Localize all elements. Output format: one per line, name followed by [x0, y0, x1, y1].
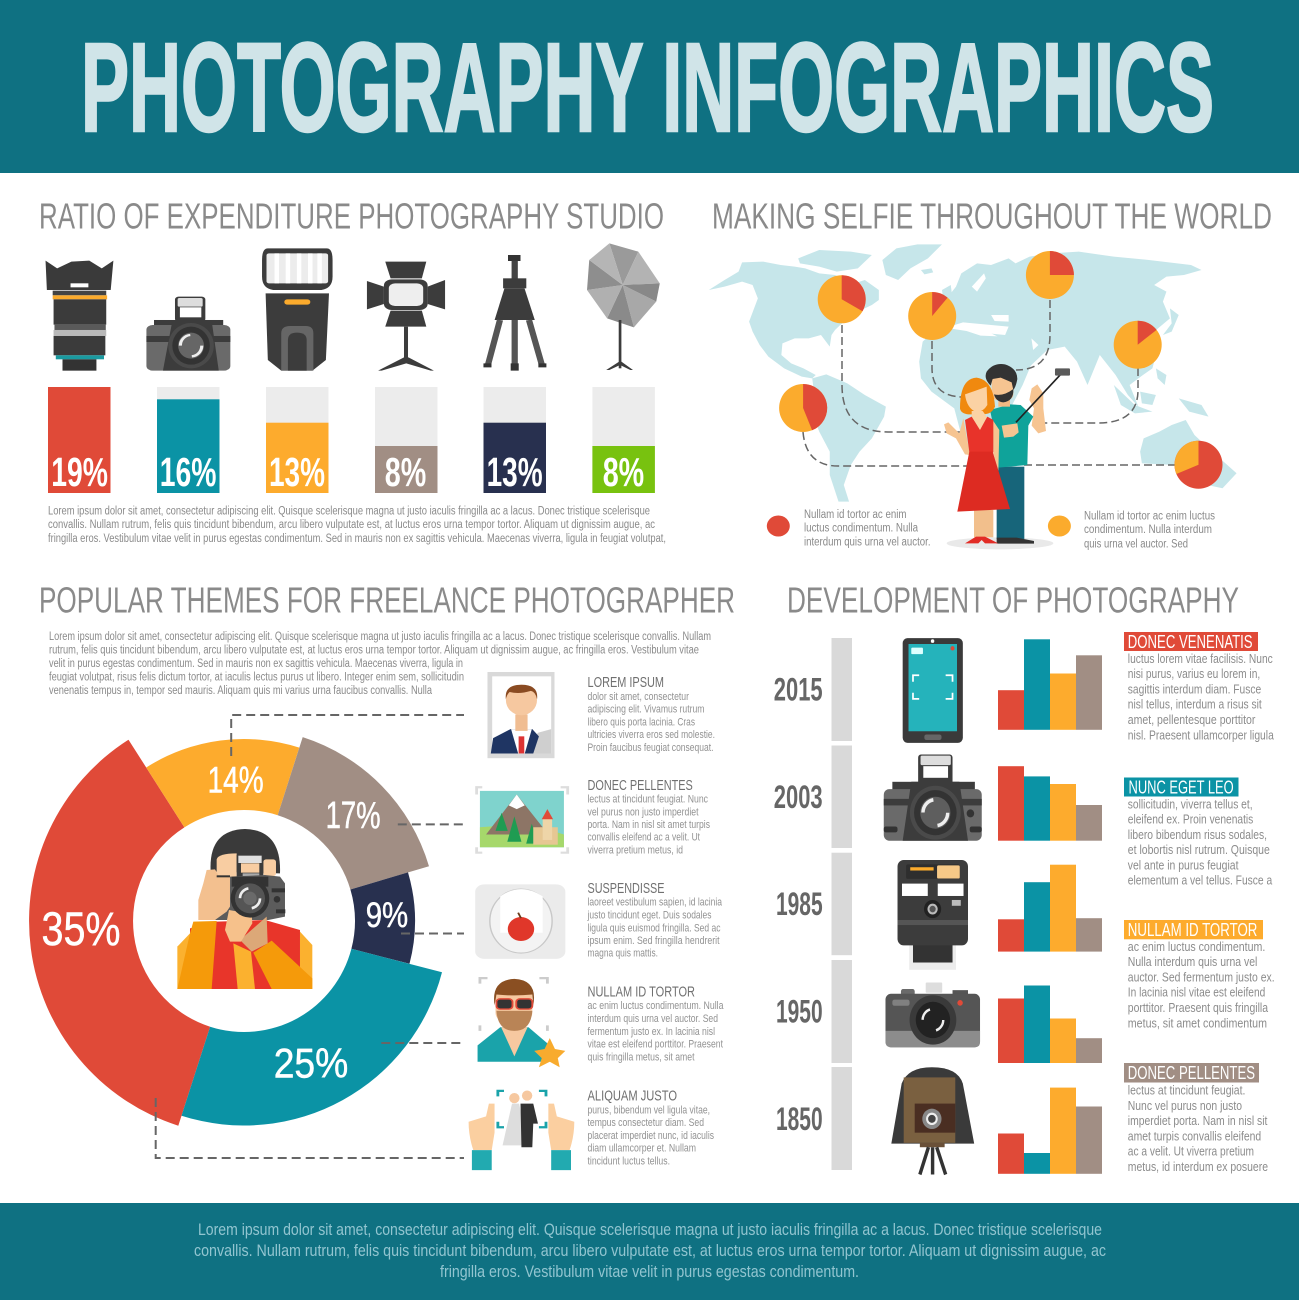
bar: 16%	[157, 387, 220, 495]
icon: flash	[262, 248, 333, 371]
bar chart: 1950	[998, 986, 1102, 1063]
heading: popular themes: POPULAR THEMES FOR FREELANCE PHOTOGRAPHER	[39, 580, 735, 620]
segment: 25%	[182, 949, 442, 1125]
icon: camera	[146, 297, 230, 371]
footer text: convallis. Nullam rutrum, felis quis tincidunt bibendum, arcu libero vulputate est, at luctus eros urna tempor tortor. Aliquam ut dignissim augue, ac	[194, 1242, 1106, 1260]
theme: aliquam justo	[588, 1088, 714, 1167]
note: donec venenatis	[1124, 632, 1274, 742]
icon: antique camera	[891, 1067, 974, 1174]
note: donec venenatis: amet, pellentesque porttitor	[1128, 713, 1255, 727]
theme: lorem ipsum: dolor sit amet, consectetur	[588, 691, 689, 703]
segment: 14%	[146, 739, 299, 827]
bar: 8% green	[592, 387, 655, 495]
timeline years: 1950	[776, 994, 823, 1030]
man	[986, 364, 1070, 544]
timeline bar	[832, 638, 852, 1170]
icon: photographer	[177, 829, 312, 989]
bar chart: expenditure	[48, 387, 655, 495]
paragraph: expenditure	[48, 506, 666, 545]
theme: nullam id tortor: NULLAM ID TORTOR	[588, 984, 695, 1000]
theme: nullam id tortor	[588, 984, 724, 1063]
theme: suspendisse: SUSPENDISSE	[588, 880, 664, 897]
theme: lorem ipsum: adipiscing elit. Vivamus rutrum	[588, 704, 704, 716]
paragraph: expenditure: fringilla eros. Vestibulum vitae velit in purus egestas condimentum. Sed in mauris non ex sagittis vehicula. Maecenas viverra, ligula in feugiat volutpat,	[48, 533, 666, 545]
segment: 9%	[350, 872, 415, 964]
paragraph: themes intro: venenatis tempus in, tempor sed mauris. Aliquam quis mi varius urna faucibus convallis. Nulla	[49, 685, 432, 697]
bar: 16%: 16%	[160, 449, 216, 495]
theme: nullam id tortor: vitae est eleifend porttitor. Praesent	[588, 1039, 723, 1051]
icon: smartphone	[903, 638, 963, 743]
bar chart: 1850	[998, 1088, 1102, 1174]
timeline years: 2003	[774, 779, 823, 815]
note: nullam id tortor: In lacinia nisl vitae est eleifend	[1128, 986, 1265, 1000]
theme: aliquam justo: tincidunt luctus tellus.	[588, 1155, 670, 1167]
note: donec pellentes	[1124, 1063, 1268, 1174]
note: donec venenatis: nisl tellus, interdum a risus sit	[1128, 698, 1262, 712]
icon: portrait	[487, 672, 554, 758]
theme: suspendisse: ligula quis euismod fringilla. Sed ac	[588, 922, 721, 934]
theme: donec pellentes: porta. Nam in nisl sit amet turpis	[588, 819, 710, 831]
theme: suspendisse: ipsum enim. Sed fringilla hendrerit	[588, 935, 720, 947]
note: nunc eget leo: sollicitudin, viverra tellus et,	[1128, 797, 1253, 811]
theme: lorem ipsum: Proin faucibus feugiat consequat.	[588, 742, 714, 754]
theme thumbnails	[469, 672, 574, 1170]
theme: suspendisse: laoreet vestibulum sapien, id lacinia	[588, 897, 723, 909]
theme: aliquam justo: placerat imperdiet nunc, id iaculis	[588, 1130, 714, 1142]
legend: orange: quis urna vel auctor. Sed	[1084, 538, 1188, 550]
note: donec pellentes: metus, id interdum ex posuere	[1128, 1160, 1268, 1174]
note: nunc eget leo: libero bibendum risus sodales,	[1128, 828, 1267, 842]
donut leader lines	[156, 715, 464, 1158]
theme: nullam id tortor: fermentum justo ex. In lacinia nisl	[588, 1026, 715, 1038]
theme: donec pellentes	[588, 777, 710, 856]
note: donec pellentes: amet turpis convallis eleifend	[1128, 1129, 1261, 1143]
icon: star portrait	[478, 978, 565, 1067]
header banner	[0, 0, 1299, 173]
theme: aliquam justo: diam ullamcorper et. Nullam	[588, 1143, 696, 1155]
theme: nullam id tortor: interdum quis urna vel auctor. Sed	[588, 1013, 718, 1025]
bar: 13% navy	[484, 387, 546, 495]
timeline years: 1985	[776, 886, 823, 922]
donut labels: 17%	[326, 795, 381, 837]
footer text: fringilla eros. Vestibulum vitae velit in purus egestas condimentum.	[440, 1263, 859, 1281]
donut labels: 14%	[208, 760, 264, 801]
icon: landscape photo	[477, 787, 568, 853]
legend: red: luctus condimentum. Nulla	[804, 522, 919, 534]
donut labels	[42, 760, 408, 1086]
legend: red	[767, 509, 930, 548]
heading: ratio of expenditure: RATIO OF EXPENDITURE PHOTOGRAPHY STUDIO	[39, 196, 664, 236]
donut labels: 25%	[274, 1040, 348, 1086]
note: nullam id tortor	[1124, 920, 1275, 1030]
pie: asia	[1114, 321, 1162, 369]
theme: suspendisse: magna quis mattis.	[588, 948, 658, 960]
theme: donec pellentes: DONEC PELLENTES	[588, 777, 693, 794]
note: nullam id tortor: ac enim luctus condimentum.	[1128, 940, 1265, 954]
segment: 35%	[29, 740, 210, 1126]
paragraph: themes intro: feugiat volutpat, risus felis dictum tortor, at iaculis lectus purus ut libero. Integer enim sem, sollicitudin	[49, 672, 464, 684]
note: nunc eget leo: vel ante in purus feugiat	[1128, 858, 1239, 872]
theme: donec pellentes: lectus at tincidunt feugiat. Nunc	[588, 794, 708, 806]
pie: north america	[818, 275, 866, 323]
note: donec pellentes: lectus at tincidunt feugiat.	[1128, 1084, 1245, 1098]
dashed connectors	[803, 300, 1176, 466]
figures: selfie couple	[944, 364, 1070, 549]
icon: umbrella	[587, 243, 660, 370]
bar chart: 1985	[998, 865, 1102, 952]
paragraph: expenditure: convallis. Nullam rutrum, felis quis tincidunt bibendum, arcu libero vulputate est, at luctus eros urna tempor tortor. Aliquam ut dignissim augue, ac	[48, 519, 655, 531]
paragraph: expenditure: Lorem ipsum dolor sit amet, consectetur adipiscing elit. Quisque scelerisque magna ut justo iaculis fringilla ac a lacus. Donec tristique scelerisque	[48, 506, 650, 518]
footer banner	[0, 1203, 1299, 1300]
camera icons	[884, 638, 982, 1174]
legend: orange	[1048, 510, 1215, 550]
map pie charts	[779, 251, 1222, 489]
note: nunc eget leo: elementum a vel tellus. Fusce a	[1128, 874, 1272, 888]
note: donec pellentes: DONEC PELLENTES	[1128, 1063, 1255, 1083]
theme: donec pellentes: vel purus non justo imperdiet	[588, 806, 698, 818]
theme: lorem ipsum	[588, 674, 715, 754]
icon: lens	[46, 261, 113, 371]
donut labels: 9%	[366, 896, 408, 935]
icon: tripod	[487, 255, 542, 371]
note: nullam id tortor: Nulla interdum quis urna vel	[1128, 955, 1257, 969]
note: donec venenatis: sagittis interdum diam. Fusce	[1128, 682, 1261, 696]
bar: 8% green: 8%	[603, 449, 644, 495]
icon: studio light	[367, 262, 445, 371]
note: nullam id tortor: auctor. Sed fermentum justo ex.	[1128, 970, 1275, 984]
legend: orange: condimentum. Nulla interdum	[1084, 524, 1212, 536]
note: donec pellentes: Nunc vel purus non justo	[1128, 1099, 1242, 1113]
equipment icons	[46, 243, 660, 371]
theme: lorem ipsum: ultricies viverra eros sed molestie.	[588, 729, 715, 741]
bar chart: 2015	[998, 639, 1102, 730]
paragraph: themes intro	[49, 631, 711, 697]
note: nullam id tortor: metus, sit amet condimentum	[1128, 1016, 1267, 1030]
paragraph: themes intro: Lorem ipsum dolor sit amet, consectetur adipiscing elit. Quisque scelerisque magna ut justo iaculis fringilla ac a lacus. Donec tristique scelerisque convallis. Nullam	[49, 631, 711, 643]
donut chart	[29, 737, 442, 1126]
theme: aliquam justo: purus, bibendum vel ligula vitae,	[588, 1104, 710, 1116]
bar: 13% navy: 13%	[487, 449, 543, 495]
footer text: Lorem ipsum dolor sit amet, consectetur adipiscing elit. Quisque scelerisque magna ut justo iaculis fringilla ac a lacus. Donec tristique scelerisque	[198, 1221, 1102, 1239]
pie: south america	[779, 384, 827, 432]
theme: nullam id tortor: ac enim luctus condimentum. Nulla	[588, 1000, 724, 1012]
note: nunc eget leo: et lobortis nisl rutrum. Quisque	[1128, 843, 1270, 857]
pie: atlantic	[908, 292, 956, 340]
note: donec venenatis: DONEC VENENATIS	[1128, 632, 1253, 652]
theme: aliquam justo: tempus consectetur diam. Sed	[588, 1117, 704, 1129]
theme: suspendisse: justo tincidunt eget. Duis sodales	[587, 910, 712, 922]
timeline years: 2015	[774, 672, 823, 708]
note: nunc eget leo: eleifend ex. Proin venenatis	[1128, 813, 1253, 827]
bar: 13%	[266, 387, 328, 495]
theme: lorem ipsum: libero quis porta lacinia. Cras	[588, 716, 695, 728]
note: donec pellentes: ac a velit. Ut viverra pretium	[1128, 1145, 1254, 1159]
pie: russia	[1026, 251, 1074, 299]
legend: red: Nullam id tortor ac enim	[804, 509, 906, 521]
note: nullam id tortor: NULLAM ID TORTOR	[1128, 920, 1257, 940]
bar: 19%	[48, 387, 110, 495]
theme: suspendisse	[587, 880, 723, 960]
bar: 13%: 13%	[269, 449, 325, 495]
world map	[709, 244, 1237, 502]
legend: orange: Nullam id tortor ac enim luctus	[1084, 510, 1215, 522]
icon: product photo	[475, 884, 565, 959]
note: donec pellentes: imperdiet porta. Nam in nisl sit	[1128, 1114, 1268, 1128]
woman	[944, 378, 1010, 543]
theme: nullam id tortor: quis fringilla metus, sit amet	[588, 1051, 694, 1063]
timeline years	[774, 672, 823, 1137]
icon: rangefinder	[885, 983, 980, 1047]
theme: lorem ipsum: LOREM IPSUM	[588, 674, 664, 691]
panel: development of photography	[774, 580, 1275, 1174]
icon: dslr	[884, 755, 982, 841]
icon: wedding hands	[469, 1090, 574, 1170]
paragraph: themes intro: rutrum, felis quis tincidunt bibendum, arcu libero vulputate est, at luctus eros urna tempor tortor. Aliquam ut dignissim augue, ac fringilla eros. Vestibulum vitae	[49, 644, 699, 656]
footer text	[194, 1221, 1106, 1281]
bar: 19%: 19%	[51, 449, 108, 495]
bar: 8%	[375, 387, 438, 495]
panel: selfie world map	[709, 196, 1272, 550]
icon: instant camera	[898, 860, 968, 970]
legend: red: interdum quis urna vel auctor.	[804, 536, 930, 548]
theme: donec pellentes: viverra pretium metus, id	[588, 844, 683, 856]
paragraph: themes intro: velit in purus egestas condimentum. Sed in mauris non ex sagittis vehicula. Maecenas viverra, ligula in	[49, 658, 463, 670]
bar: 8%: 8%	[385, 449, 426, 495]
theme: aliquam justo: ALIQUAM JUSTO	[588, 1088, 677, 1104]
note: nunc eget leo	[1124, 778, 1272, 888]
pie: australia	[1174, 441, 1222, 489]
timeline years: 1850	[776, 1101, 823, 1137]
note: donec venenatis: nisi purus, varius eu lorem in,	[1128, 667, 1260, 681]
note: nunc eget leo: NUNC EGET LEO	[1128, 778, 1234, 798]
donut labels: 35%	[42, 902, 120, 955]
panel: popular themes	[29, 580, 735, 1170]
segment: 17%	[278, 737, 429, 890]
theme: donec pellentes: convallis eleifend ac a velit. Ut	[588, 832, 700, 844]
bar chart: 2003	[998, 766, 1102, 841]
note: nullam id tortor: porttitor. Praesent quis fringilla	[1128, 1001, 1268, 1015]
panel: ratio of expenditure	[39, 196, 666, 545]
